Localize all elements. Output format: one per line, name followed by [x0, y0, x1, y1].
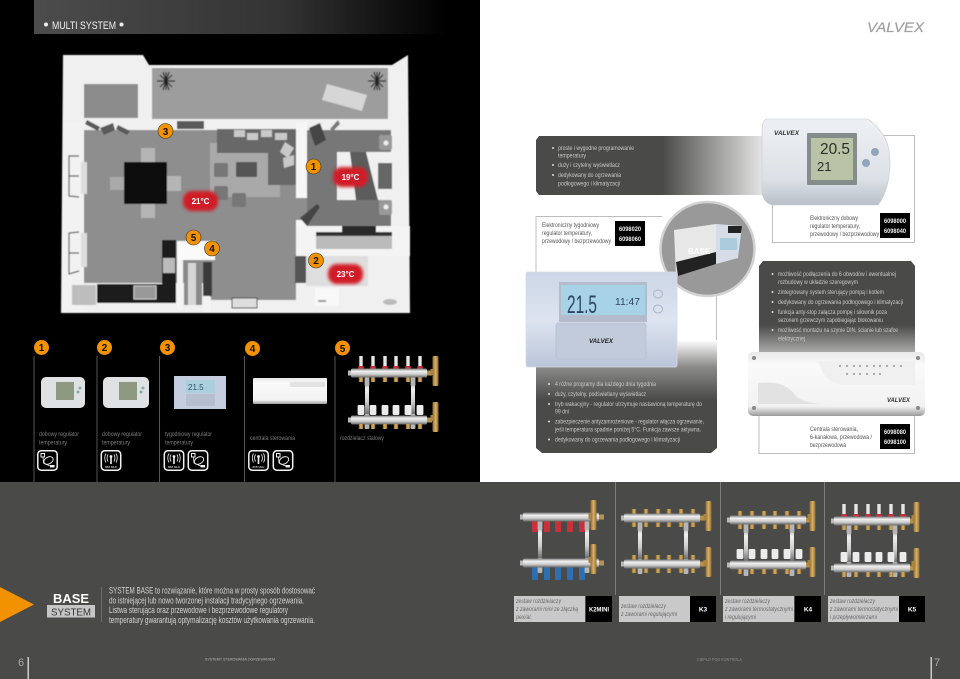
panel: daily thermostat features: duży i czytelny wyświetlacz — [558, 162, 620, 169]
plan marker 4 — [204, 241, 220, 256]
panel: weekly thermostat features — [536, 340, 717, 453]
label K5 — [828, 596, 925, 622]
label K4: i regulującymi — [725, 614, 756, 621]
heat label 21: 21°C — [192, 197, 210, 206]
panel: control unit features: funkcja anty-stop załącza pompę i siłownik poza — [778, 309, 887, 316]
legend item 3: 868 MHz — [168, 465, 180, 469]
label K2MINI: K2MINI — [589, 606, 609, 614]
panel: weekly thermostat features: zabezpieczenie antyzamrożeniowe - regulator włącza ogrzewanie, — [555, 418, 704, 426]
label K2MINI: zestaw rozdzielaczy — [515, 598, 562, 605]
big weekly thermostat: 11:47 — [615, 297, 640, 308]
big daily thermostat: 21 — [817, 159, 831, 174]
big control unit: VALVEX — [887, 398, 911, 404]
panel: control unit features: sezonem grzewczym zapobiegając blokowaniu — [778, 317, 883, 324]
heat label 19: 19°C — [342, 173, 360, 182]
text block: base system description: temperatury gwarantują optymalizację kosztów użytkowania ogrzewania. — [109, 614, 315, 625]
footer right: CIEPŁO POD KONTROLĄ — [697, 657, 743, 662]
label K3: zestaw rozdzielaczy — [620, 603, 667, 610]
plan marker 1 — [306, 159, 321, 174]
plan marker 5: 5 — [191, 233, 197, 244]
heat label 19 — [333, 167, 368, 187]
footer right: 7 — [934, 657, 940, 669]
centre wall — [296, 122, 307, 198]
heat label 21 — [183, 191, 218, 211]
logo: valvex: VALVEX — [867, 19, 925, 35]
circle: base box photo — [660, 202, 754, 296]
panel: weekly thermostat features: tryb wakacyjny - regulator utrzymuje nastawioną temperaturę do — [555, 401, 702, 408]
legend item 2 — [96, 340, 149, 482]
label K4: K4 — [804, 606, 813, 614]
orange arrow — [0, 587, 34, 622]
code box — [880, 213, 910, 238]
product box: weekly thermostat: regulator temperatury, — [542, 230, 592, 237]
panel: weekly thermostat features: jeśli temperatura spadnie poniżej 5°C. Funkcja zawsze aktywna. — [554, 426, 701, 434]
logo: base system: BASE — [53, 591, 89, 606]
plan marker 2: 2 — [313, 256, 319, 267]
plan marker 5 — [186, 230, 201, 245]
product box: control unit: bezprzewodowa — [810, 442, 846, 449]
code box: 6098000 — [884, 218, 907, 225]
text block: base system description: SYSTEM BASE to rozwiązanie, które można w prosty sposób dostosować — [109, 584, 315, 596]
big weekly thermostat — [526, 272, 677, 367]
product box: daily thermostat: przewodowy / bezprzewodowy — [810, 231, 880, 238]
code box: 6098100 — [884, 439, 907, 446]
small room — [84, 84, 138, 118]
panel: daily thermostat features: podłogowego i klimatyzacji — [558, 180, 620, 188]
product box: daily thermostat: regulator temperatury, — [810, 223, 860, 230]
label K2MINI — [514, 596, 612, 622]
logo: base system: SYSTEM — [51, 606, 91, 618]
thermostat 3 — [174, 376, 226, 409]
label K3: K3 — [699, 606, 708, 614]
footer left — [18, 656, 275, 679]
label K3: z zaworami regulującymi — [620, 611, 677, 618]
product box: weekly thermostat: przewodowy / bezprzewodowy — [542, 238, 612, 245]
label K3 — [619, 596, 716, 622]
legend item 3 — [159, 340, 226, 482]
heat label 23: 23°C — [337, 270, 355, 279]
code box: 6098020 — [619, 226, 642, 233]
manifold K3 — [621, 501, 712, 577]
legend item 5 — [334, 340, 438, 482]
legend item 2: 868 MHz — [105, 465, 117, 469]
legend item 4: 4 — [250, 344, 256, 355]
big weekly thermostat: 21.5 — [567, 291, 597, 319]
label K2MINI: pex/al. — [515, 614, 532, 621]
left wall windows — [63, 122, 87, 312]
rug — [210, 143, 280, 197]
panel: control unit features: możliwość montażu na szynie DIN, ścianie lub szafce — [778, 327, 898, 334]
control unit small — [253, 378, 327, 404]
manifold K2MINI — [520, 500, 604, 580]
panel: weekly thermostat features: 4 różne programy dla każdego dnia tygodnia — [555, 381, 656, 388]
big daily thermostat — [762, 119, 890, 205]
panel: daily thermostat features: proste i wygodne programowanie — [558, 145, 634, 152]
panel: control unit features: zintegrowany system sterujący pompą i kotłem — [778, 289, 884, 296]
manifold K4 — [727, 501, 816, 577]
code box — [615, 221, 645, 246]
product box: daily thermostat — [772, 136, 914, 242]
legend item 5: rozdzielacz stalowy — [340, 435, 385, 442]
main floor — [84, 130, 308, 300]
code box: 6098040 — [884, 228, 907, 235]
header bar: multi system — [34, 0, 447, 34]
thermostat 3: 21.5 — [188, 383, 204, 392]
panel: control unit features: elektrycznej — [778, 336, 805, 342]
legend item 1: 1 — [39, 343, 45, 354]
product box: weekly thermostat: Elektroniczny tygodniowy — [542, 222, 600, 229]
legend item 1: dobowy regulator — [39, 431, 80, 438]
dining table — [110, 148, 181, 218]
text block: base system description: do istniejącej lub nowo tworzonej instalacji tradycyjnego ogrzewania. — [109, 594, 304, 606]
wardrobe — [296, 226, 410, 256]
floor plan — [61, 55, 410, 313]
big control unit — [748, 352, 925, 416]
product box: daily thermostat: Elektroniczny dobowy — [810, 215, 859, 222]
label K5: i przepływomierzami — [830, 614, 877, 621]
label K5: zestaw rozdzielaczy — [829, 598, 876, 605]
thermostat 1 — [41, 377, 85, 408]
label K4 — [723, 596, 821, 622]
poufs and table — [214, 162, 257, 207]
plan marker 4: 4 — [209, 244, 215, 255]
big daily thermostat: 20.5 — [820, 141, 850, 158]
panel: control unit features: dedykowany do ogrzewania podłogowego i klimatyzacji — [778, 299, 903, 306]
text block: base system description — [109, 584, 315, 625]
legend item 4: centrala sterowania — [250, 435, 295, 442]
white block and stairs — [177, 241, 257, 312]
bottom column dividers — [615, 482, 825, 595]
code box — [880, 424, 910, 449]
panel: weekly thermostat features: duży, czytelny, podświetlany wyświetlacz — [555, 391, 646, 398]
product box: control unit: Centrala sterowania, — [810, 426, 858, 433]
footer left: 6 — [18, 657, 24, 669]
panel: daily thermostat features: temperatury — [558, 152, 587, 160]
panel: daily thermostat features — [536, 136, 768, 195]
legend item 2: temperatury — [102, 440, 131, 446]
bedroom — [300, 120, 392, 226]
legend item 4: 868 MHz — [252, 465, 265, 469]
label K4: zestaw rozdzielaczy — [724, 598, 771, 605]
panel: control unit features: możliwość podłączenia do 6 obwodów i ewentualnej — [778, 271, 896, 278]
heat label 23 — [328, 264, 363, 284]
legend item 2: dobowy regulator — [102, 431, 143, 438]
header bar: multi system: MULTI SYSTEM — [52, 20, 116, 32]
manifold K5 — [831, 502, 920, 578]
legend item 1: temperatury — [39, 440, 68, 446]
label K4: z zaworami termostatycznymi — [724, 606, 793, 613]
circle: base box photo: BASE — [688, 247, 711, 256]
plan marker 3: 3 — [163, 127, 169, 138]
product box: weekly thermostat — [536, 216, 716, 345]
door frames on wall — [85, 120, 204, 135]
plan marker 1: 1 — [311, 162, 317, 173]
panel: control unit features — [759, 261, 915, 354]
panel: weekly thermostat features: 99 dni — [555, 408, 569, 416]
legend item 1 — [34, 340, 85, 482]
code box: 6098080 — [884, 429, 907, 436]
thermostat 2 — [103, 377, 149, 408]
terrace — [152, 68, 388, 119]
footer left: SYSTEMY STEROWANIA OGRZEWANIEM — [205, 656, 275, 662]
label K5: K5 — [908, 606, 917, 614]
product box: control unit: 6-kanałowa, przewodowa / — [810, 434, 872, 441]
sofa — [217, 129, 296, 185]
plan marker 3 — [158, 124, 173, 138]
big daily thermostat: VALVEX — [774, 131, 800, 137]
bathroom — [295, 256, 397, 306]
legend item 3: 3 — [165, 343, 171, 354]
footer right — [697, 657, 940, 679]
panel: weekly thermostat features: dedykowany do ogrzewania podłogowego i klimatyzacji — [555, 436, 680, 444]
legend item 2: 2 — [102, 343, 108, 354]
big weekly thermostat: VALVEX — [589, 339, 614, 345]
kitchen — [72, 240, 176, 305]
logo: base system — [47, 591, 95, 618]
legend item 5: 5 — [340, 344, 346, 355]
panel: daily thermostat features: dedykowany do ogrzewania — [558, 172, 621, 179]
plan marker 2 — [308, 253, 324, 268]
legend item 3: tygodniowy regulator — [165, 431, 213, 438]
text block: base system description: Listwa sterująca oraz przewodowe i bezprzewodowe regulatory — [109, 604, 288, 615]
legend item 4 — [244, 341, 327, 482]
code box: 6098060 — [619, 236, 642, 243]
label K5: z zaworami termostatycznymi — [829, 606, 898, 613]
label K2MINI: z zaworami mini ze złączką — [515, 606, 578, 613]
panel: control unit features: rozbudowy w układzie szeregowym — [778, 279, 858, 286]
legend item 3: temperatury — [165, 440, 194, 446]
manifold steel — [348, 356, 438, 432]
product box: control unit — [759, 410, 914, 454]
